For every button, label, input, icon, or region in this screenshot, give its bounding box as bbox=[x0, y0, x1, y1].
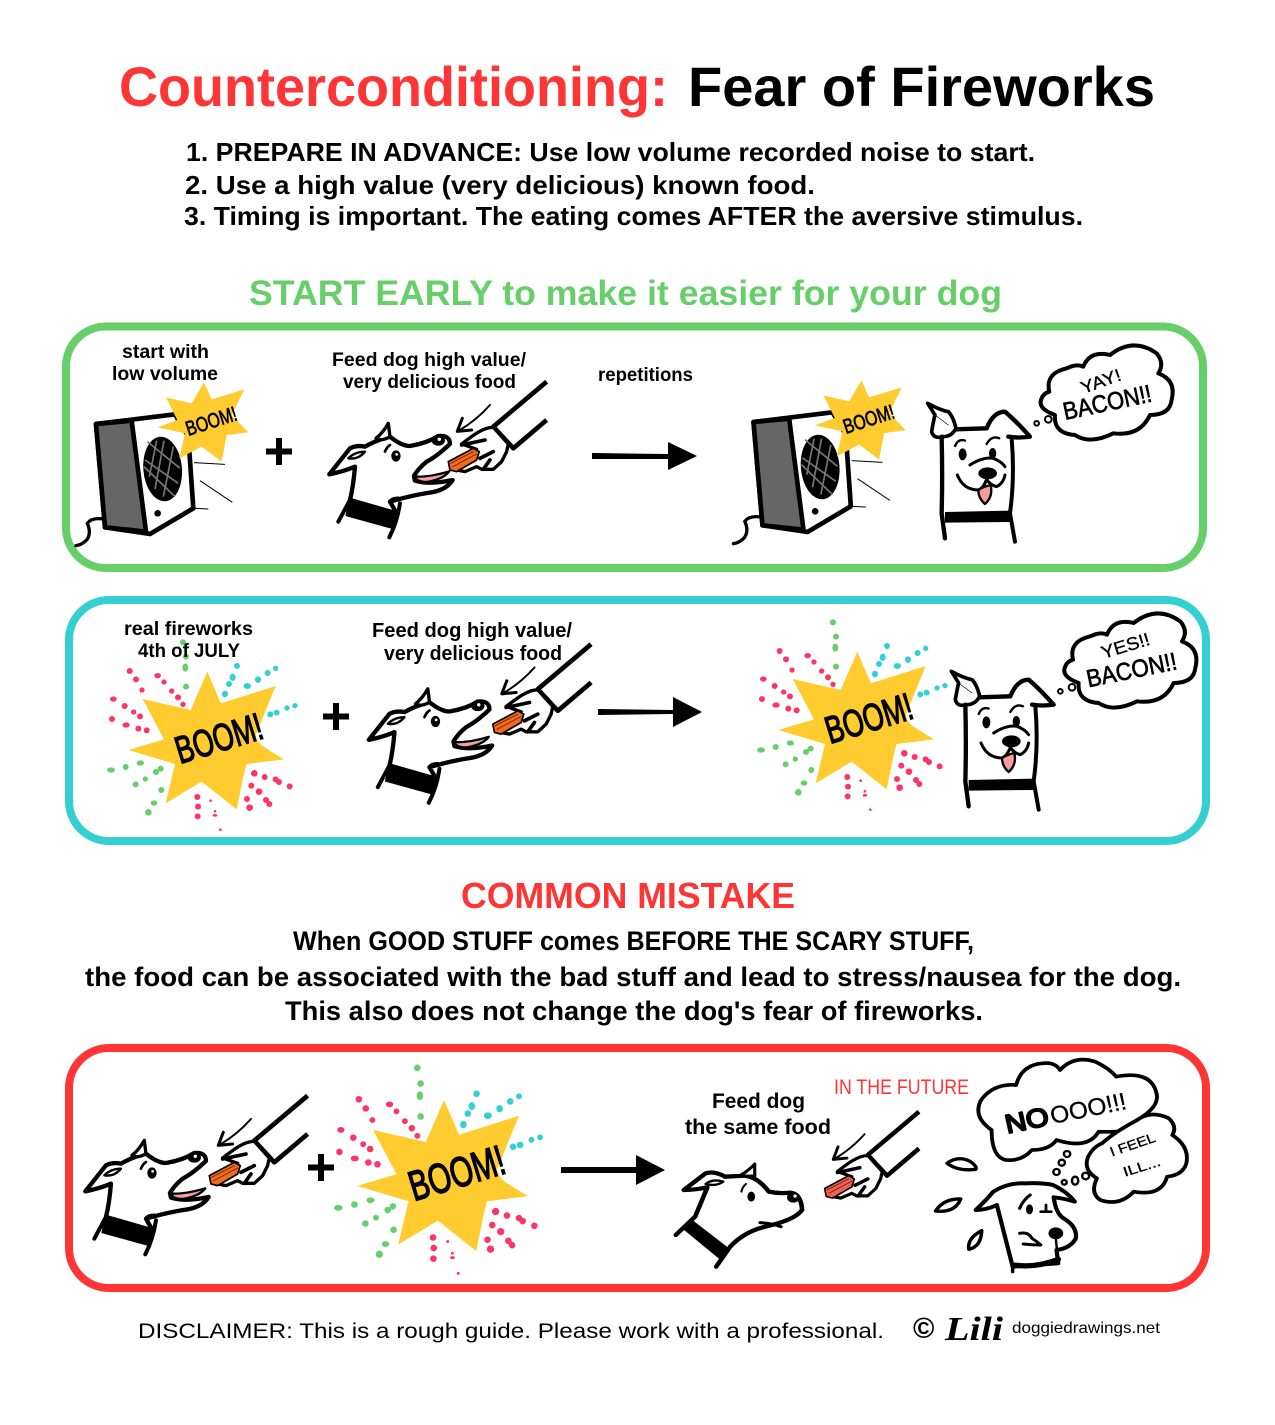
caption: real fireworks: real fireworks bbox=[124, 619, 253, 640]
heading: common mistake: COMMON MISTAKE bbox=[461, 875, 795, 916]
icon: speaker with boom bbox=[733, 380, 906, 544]
caption: feed dog bbox=[332, 350, 527, 393]
icon: sad dog with thought bubbles bbox=[935, 1060, 1187, 1272]
icon: fireworks burst: BOOM! bbox=[403, 1136, 510, 1210]
numbered instructions: 2. Use a high value (very delicious) known food. bbox=[185, 170, 815, 200]
thought cloud: i feel ill: I FEEL bbox=[1108, 1130, 1158, 1159]
signature bbox=[913, 1311, 1004, 1348]
text block: mistake explanation: the food can be associated with the bad stuff and lead to stress/nausea for the dog. bbox=[85, 962, 1181, 992]
icon: speaker with boom: BOOM! bbox=[840, 401, 897, 439]
icon: dog looking ahead bbox=[676, 1164, 802, 1267]
icon: dog eating from hand bbox=[369, 644, 591, 803]
text block: mistake explanation bbox=[85, 926, 1181, 1026]
text block: mistake explanation: When GOOD STUFF comes BEFORE THE SCARY STUFF, bbox=[293, 926, 974, 956]
caption: real fireworks: 4th of JULY bbox=[138, 641, 240, 662]
thought cloud: noooo bbox=[978, 1060, 1157, 1160]
numbered instructions bbox=[184, 137, 1083, 231]
icon: happy dog with thought bubble: BACON!! bbox=[1084, 648, 1179, 693]
text block: mistake explanation: This also does not change the dog's fear of fireworks. bbox=[285, 996, 983, 1026]
arrow bbox=[598, 697, 702, 727]
thought cloud: noooo: OOO!!! bbox=[1048, 1089, 1129, 1130]
thought cloud: i feel ill: ILL... bbox=[1121, 1154, 1163, 1179]
title bbox=[119, 55, 1155, 118]
caption: feed dog: Feed dog high value/ bbox=[332, 350, 527, 371]
icon: speaker with boom: BOOM! bbox=[183, 403, 240, 441]
caption: feed dog: Feed dog high value/ bbox=[372, 620, 572, 642]
icon: speaker with boom bbox=[76, 382, 248, 546]
caption: start with low volume bbox=[112, 342, 218, 385]
disclaimer: DISCLAIMER: This is a rough guide. Please work with a professional. bbox=[138, 1320, 884, 1343]
icon: happy dog with thought bubble: YAY! bbox=[1078, 365, 1124, 398]
signature: Lili bbox=[944, 1311, 1004, 1348]
panel: common mistake (red) bbox=[69, 1048, 1206, 1288]
label: repetitions: repetitions bbox=[598, 365, 693, 386]
arrow bbox=[561, 1155, 665, 1185]
plus sign bbox=[323, 703, 349, 730]
caption: start with low volume: low volume bbox=[112, 364, 218, 385]
signature: © bbox=[913, 1313, 934, 1345]
icon: fireworks burst bbox=[334, 1065, 543, 1275]
icon: fireworks burst: BOOM! bbox=[820, 685, 918, 753]
panel: real fireworks (teal) bbox=[69, 600, 1206, 841]
numbered instructions: 3. Timing is important. The eating comes AFTER the aversive stimulus. bbox=[184, 201, 1083, 231]
panel: start early (green) bbox=[66, 326, 1203, 568]
icon: dog eating from hand bbox=[329, 382, 547, 537]
plus sign bbox=[308, 1154, 334, 1181]
icon: happy dog with thought bubble bbox=[928, 345, 1173, 542]
title: Fear of Fireworks bbox=[688, 55, 1155, 118]
sweat drops bbox=[935, 1159, 982, 1249]
caption: feed dog: very delicious food bbox=[343, 372, 516, 393]
caption: feed dog the same food: Feed dog bbox=[712, 1090, 805, 1113]
icon: dog eating from hand bbox=[85, 1096, 308, 1254]
thought cloud: i feel ill bbox=[1087, 1115, 1187, 1202]
icon: fireworks burst: BOOM! bbox=[170, 705, 268, 773]
caption: feed dog the same food bbox=[685, 1090, 831, 1139]
icon: hand with food bbox=[825, 1112, 919, 1198]
label: in the future: IN THE FUTURE bbox=[834, 1076, 969, 1099]
icon: fireworks burst bbox=[107, 639, 298, 831]
title: Counterconditioning: bbox=[119, 55, 668, 118]
icon: happy dog with thought bubble: BACON!! bbox=[1061, 381, 1154, 426]
plus sign bbox=[266, 438, 292, 465]
icon: happy dog with thought bubble bbox=[951, 613, 1196, 810]
caption: feed dog the same food: the same food bbox=[685, 1116, 831, 1139]
caption: real fireworks bbox=[124, 619, 253, 662]
caption: start with low volume: start with bbox=[122, 342, 209, 363]
arrow bbox=[592, 442, 697, 470]
icon: happy dog with thought bubble: YES!! bbox=[1099, 629, 1152, 663]
numbered instructions: 1. PREPARE IN ADVANCE: Use low volume recorded noise to start. bbox=[186, 137, 1035, 167]
thought cloud: noooo: NO bbox=[1002, 1102, 1052, 1139]
caption: feed dog bbox=[372, 620, 572, 665]
caption: feed dog: very delicious food bbox=[384, 643, 562, 665]
heading: start early: START EARLY to make it easier for your dog bbox=[249, 274, 1002, 313]
website: doggiedrawings.net bbox=[1012, 1320, 1161, 1337]
icon: fireworks burst bbox=[757, 619, 948, 811]
